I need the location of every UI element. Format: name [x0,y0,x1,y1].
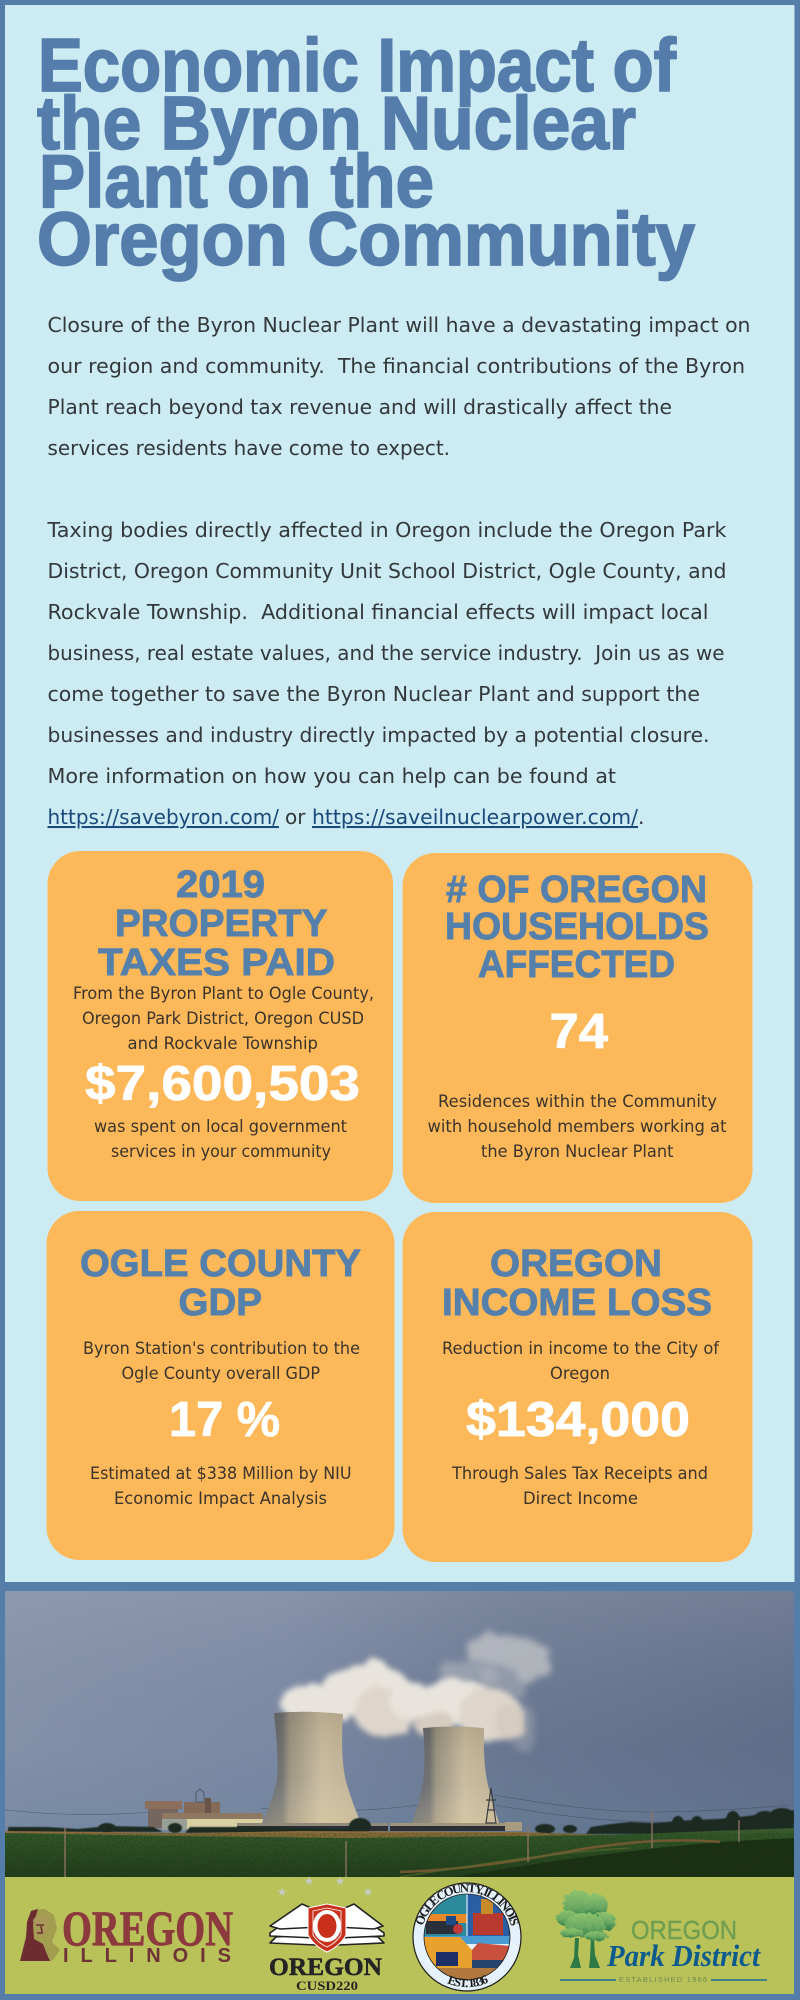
logo: Oregon Park District: ESTABLISHED 1966 [619,1975,707,1984]
logo: Oregon Illinois: OREGON [62,1900,233,1956]
text block: closure introduction: Plant reach beyond tax revenue and will drastically affect the [48,395,672,419]
panel: 2019 property taxes paid: TAXES PAID [98,942,335,984]
panel: Ogle County GDP: OGLE COUNTY [80,1243,361,1285]
seal lettering: EST. 1836 [447,1975,488,1988]
field [5,1828,794,1877]
logo: Ogle County seal [412,1882,522,1992]
icon: stars: ★ [304,1874,314,1888]
title: Economic Impact of [38,23,677,107]
panel: Ogle County GDP: 17 % [169,1393,280,1447]
logo: Oregon Park District: Park District [606,1938,761,1973]
panel: 2019 property taxes paid: PROPERTY [115,903,328,945]
cooling tower one [262,1712,361,1823]
title [37,23,695,281]
icon: stars: ★ [335,1874,345,1888]
title: Oregon Community [37,197,695,281]
title: the Byron Nuclear [37,81,636,165]
logo: Oregon CUSD220: OREGON [269,1954,382,1981]
field texture [5,1833,794,1877]
seal lettering: OGLE COUNTY, ILLINOIS [416,1884,518,1926]
panel: 2019 property taxes paid: Oregon Park District, Oregon CUSD [82,1009,364,1028]
text block: closure introduction: Closure of the Byron Nuclear Plant will have a devastating impact on [48,313,750,337]
panel: Oregon income loss: INCOME LOSS [442,1282,712,1324]
lower right field [455,1838,794,1877]
reactor buildings [145,1789,263,1830]
icon: trees [556,1890,616,1968]
icon: Black Hawk statue portrait [20,1909,60,1961]
text block: taxing bodies and call to action: come together to save the Byron Nuclear Plant and support the [48,682,700,706]
panel: 2019 property taxes paid: $7,600,503 [85,1057,360,1111]
panel: number of Oregon households affected: with household members working at [428,1117,727,1136]
panel: Oregon income loss: Oregon [550,1364,610,1383]
icon: stars: ★ [363,1885,373,1899]
text block: closure introduction: services residents have come to expect. [48,436,450,460]
tower plinths [237,1822,522,1831]
panel: Oregon income loss: $134,000 [466,1393,690,1447]
panel: Oregon income loss [402,1212,752,1562]
panel: 2019 property taxes paid [48,851,393,1201]
text block: taxing bodies and call to action: https://savebyron.com/ [48,805,279,829]
icon: red shield [308,1904,346,1952]
seal artwork [424,1894,510,1982]
panel: number of Oregon households affected: # OF OREGON [446,869,707,911]
panel: Oregon income loss: Direct Income [523,1489,638,1508]
panel: Ogle County GDP: GDP [178,1282,262,1324]
panel: Ogle County GDP: Ogle County overall GDP [122,1364,320,1383]
logo: Oregon CUSD220 [269,1874,384,1993]
fence line [400,1840,720,1872]
tree line [8,1808,796,1834]
panel: Ogle County GDP: Byron Station's contribution to the [83,1339,360,1358]
logo: Oregon Park District [556,1890,767,1984]
panel: number of Oregon households affected: AFFECTED [478,944,675,986]
logo: Oregon CUSD220: CUSD220 [296,1978,358,1993]
panel: Ogle County GDP: Economic Impact Analysis [114,1489,327,1508]
panel: number of Oregon households affected: Residences within the Community [438,1092,717,1111]
panel: Oregon income loss: OREGON [490,1243,662,1285]
panel: Oregon income loss: Reduction in income to the City of [442,1339,720,1358]
panel: 2019 property taxes paid: 2019 [176,864,265,906]
panel: Ogle County GDP: Estimated at $338 Million by NIU [90,1464,352,1483]
text block: taxing bodies and call to action: Taxing bodies directly affected in Oregon include the Oregon Park [46,518,727,542]
panel: number of Oregon households affected [402,853,752,1203]
cooling tower two [412,1726,499,1823]
brown dirt strip [5,1831,610,1838]
utility poles [65,1811,739,1877]
pylon [486,1788,496,1823]
logo: Oregon Park District: OREGON [631,1915,737,1945]
photo: Byron nuclear plant cooling towers [5,1591,796,1877]
power lines [5,1795,790,1822]
text block: taxing bodies and call to action: . [638,805,645,829]
text block: closure introduction [48,313,750,460]
text block: taxing bodies and call to action: businesses and industry directly impacted by a potential closure. [48,723,710,747]
panel: Ogle County GDP [46,1211,394,1560]
icon: open book [270,1904,384,1945]
text block: taxing bodies and call to action: District, Oregon Community Unit School District, Ogle County, and [48,559,726,583]
panel: light blue content area [5,5,794,1582]
panel: 2019 property taxes paid: services in your community [111,1142,331,1161]
panel: 2019 property taxes paid: and Rockvale Township [128,1034,318,1053]
text block: taxing bodies and call to action: Rockvale Township. Additional financial effects will impact local [48,600,709,624]
text block: taxing bodies and call to action: More information on how you can help can be found at [48,764,616,788]
panel: 2019 property taxes paid: From the Byron Plant to Ogle County, [73,984,374,1003]
panel: Oregon income loss: Through Sales Tax Receipts and [451,1464,708,1483]
seal lettering [416,1884,518,1988]
icon: stars: ★ [277,1885,287,1899]
text block: taxing bodies and call to action: https://saveilnuclearpower.com/ [312,805,638,829]
panel: 2019 property taxes paid: was spent on local government [94,1117,348,1136]
panel: number of Oregon households affected: HOUSEHOLDS [445,906,709,948]
icon: stars [277,1874,373,1899]
logo: Oregon Illinois [20,1900,233,1967]
title: Plant on the [39,139,434,223]
text block: taxing bodies and call to action: or [285,805,306,829]
text block: taxing bodies and call to action [46,518,727,829]
text block: taxing bodies and call to action: business, real estate values, and the service industry. Join us as we [48,641,724,665]
logo band [5,1877,794,1994]
text block: closure introduction: our region and community. The financial contributions of the Byron [48,354,745,378]
steam plume [280,1635,552,1747]
panel: number of Oregon households affected: 74 [550,1005,608,1059]
panel: number of Oregon households affected: the Byron Nuclear Plant [481,1142,674,1161]
logo: Oregon Illinois: ILLINOIS [63,1945,231,1967]
